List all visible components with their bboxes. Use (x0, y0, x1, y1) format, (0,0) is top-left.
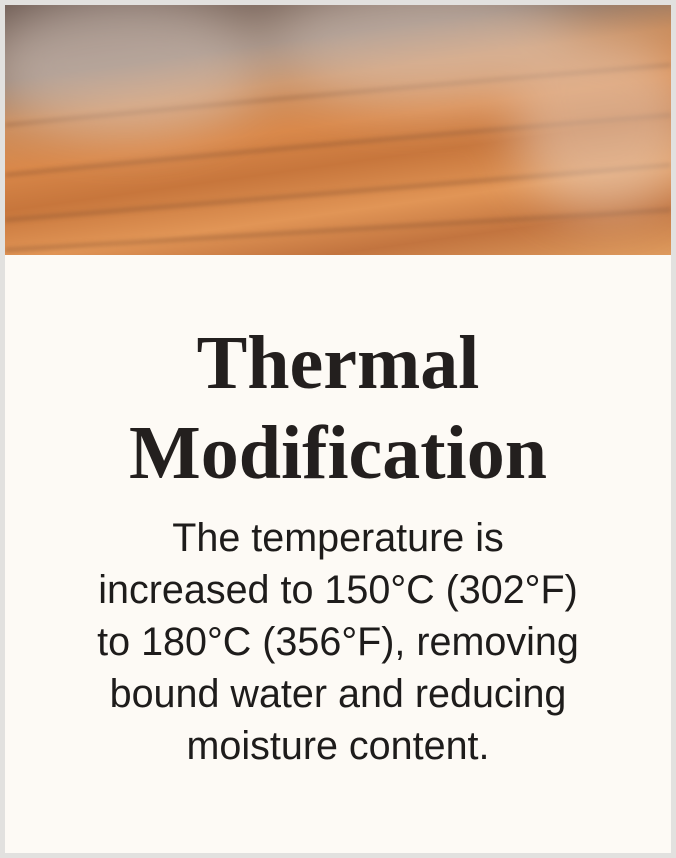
body text: The temperature is (172, 516, 504, 560)
body text: bound water and reducing (110, 672, 566, 716)
body text (97, 516, 579, 768)
title (129, 321, 547, 495)
title: Thermal (197, 321, 479, 405)
body text: moisture content. (186, 724, 489, 768)
body text: to 180°C (356°F), removing (97, 620, 579, 664)
photo: steaming wood boards (5, 5, 671, 255)
body text: increased to 150°C (302°F) (98, 568, 578, 612)
title: Modification (129, 411, 547, 495)
